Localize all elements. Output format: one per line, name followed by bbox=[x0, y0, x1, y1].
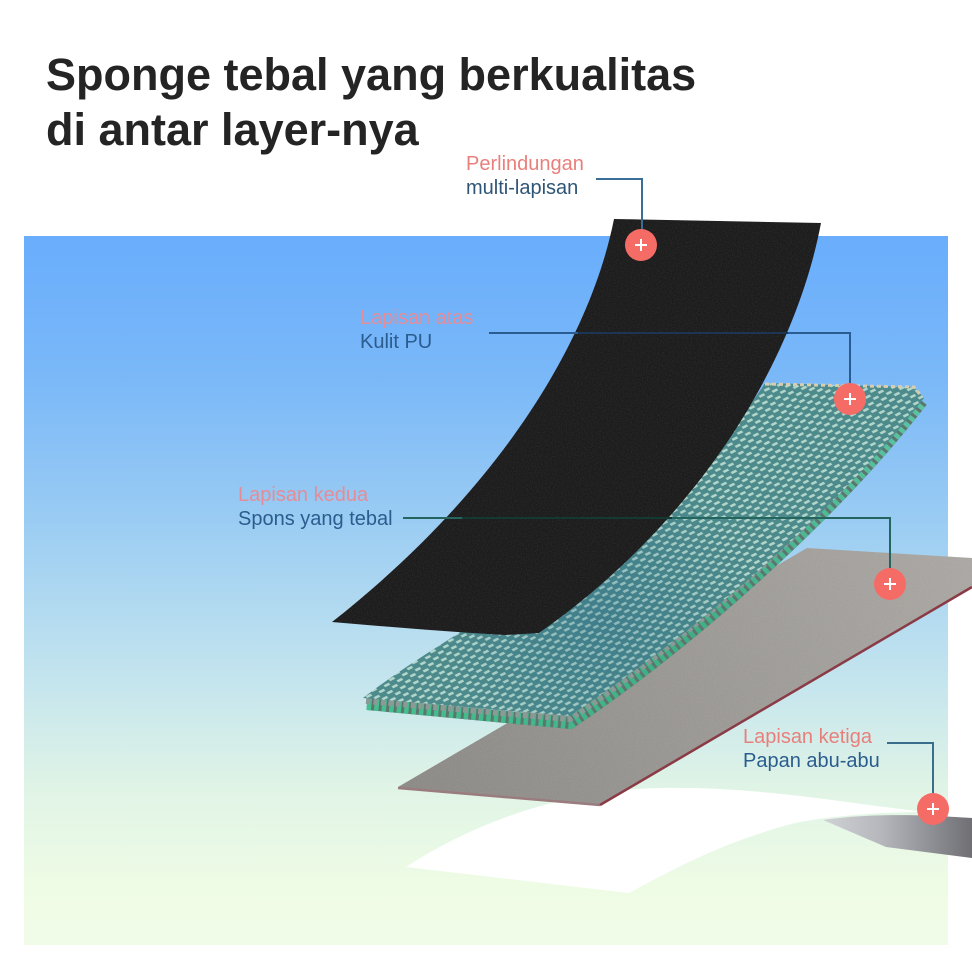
layer 3: grey board bbox=[398, 548, 972, 805]
leader line: papan abu-abu bbox=[887, 743, 933, 796]
label: Perlindungan bbox=[466, 153, 584, 199]
mesh tint bbox=[363, 383, 924, 716]
label: Lapisan kedua: Lapisan kedua bbox=[238, 484, 369, 506]
label: Perlindungan: Perlindungan bbox=[466, 153, 584, 175]
grey board front edge bbox=[398, 788, 600, 805]
label: Lapisan kedua bbox=[238, 484, 393, 530]
marker: multi-layer bbox=[625, 229, 657, 261]
label: Lapisan atas: Lapisan atas bbox=[360, 307, 473, 329]
grey shadow under sheet bbox=[823, 815, 972, 858]
mesh side teeth green bbox=[367, 401, 922, 723]
leader line: spons bbox=[403, 518, 890, 571]
title: di antar layer-nya bbox=[46, 104, 420, 155]
white curved base sheet bbox=[406, 788, 925, 893]
mesh side base bbox=[367, 401, 922, 723]
label: Lapisan atas: Kulit PU bbox=[360, 331, 432, 353]
leader line: Kulit PU bbox=[489, 333, 850, 386]
label: Perlindungan: multi-lapisan bbox=[466, 177, 578, 199]
label: Lapisan kedua: Spons yang tebal bbox=[238, 508, 393, 530]
label: Lapisan ketiga bbox=[743, 726, 880, 772]
label: Lapisan ketiga: Papan abu-abu bbox=[743, 750, 880, 772]
gradient sky background panel bbox=[24, 236, 948, 945]
marker: top layer bbox=[834, 383, 866, 415]
title: Sponge tebal yang berkualitas bbox=[46, 49, 696, 100]
mesh side teeth grey bbox=[366, 399, 919, 719]
label: Lapisan ketiga: Lapisan ketiga bbox=[743, 726, 873, 748]
layer 2: sponge mesh bbox=[363, 383, 924, 723]
mesh top surface bbox=[363, 383, 924, 716]
leader line: multi-lapisan bbox=[596, 179, 642, 232]
marker: third layer bbox=[917, 793, 949, 825]
layer 1: black PU leather bbox=[332, 219, 821, 635]
label: Lapisan atas bbox=[360, 307, 473, 353]
mesh rear edge bbox=[765, 384, 922, 397]
grey board side edge bbox=[600, 587, 972, 805]
title bbox=[46, 49, 696, 155]
marker: second layer bbox=[874, 568, 906, 600]
